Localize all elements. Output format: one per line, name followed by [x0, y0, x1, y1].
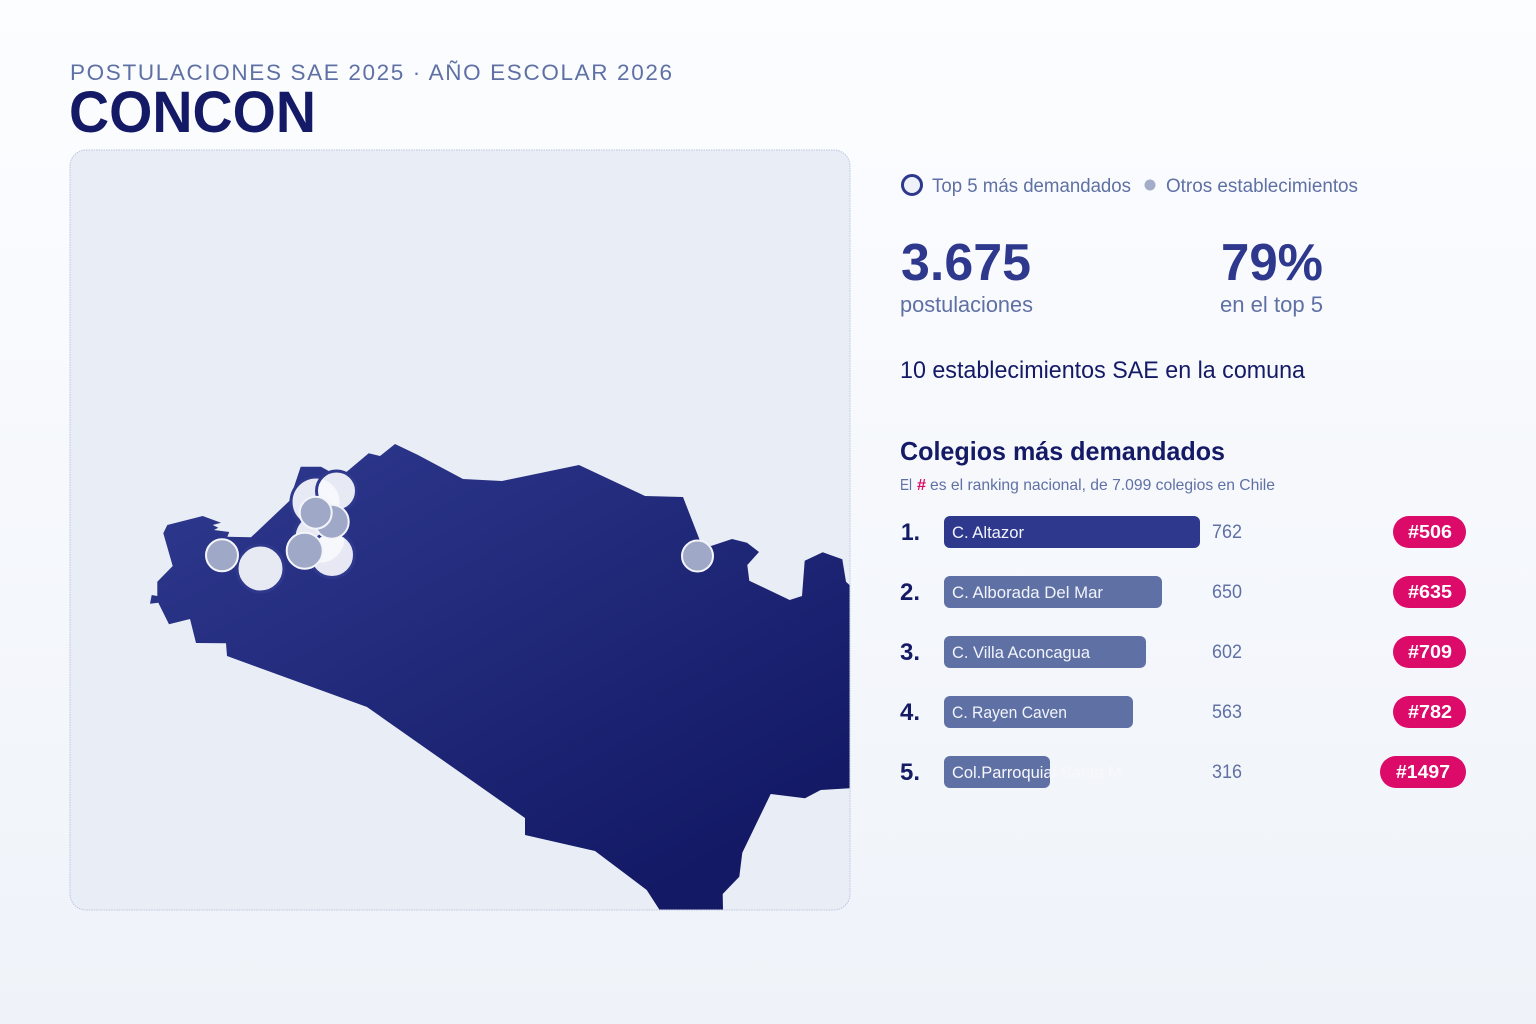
legend [902, 176, 1358, 197]
stat: applications [900, 234, 1033, 317]
markers: top 5 schools [237, 471, 356, 592]
row 2: C. Alborada Del Mar [952, 583, 1103, 602]
eyebrow: POSTULACIONES SAE 2025 · AÑO ESCOLAR 2026 [70, 60, 672, 85]
stat: top 5 share: en el top 5 [1220, 292, 1323, 317]
row 2: 650 [1212, 582, 1242, 603]
row 1: 1. [901, 519, 920, 546]
row 4 [900, 696, 1466, 728]
legend label: others: Otros establecimientos [1166, 176, 1358, 197]
ranking heading: Colegios más demandados [900, 436, 1225, 466]
stat: top 5 share [1220, 234, 1323, 317]
row 3: #709 [1408, 642, 1452, 662]
row 1: C. Altazor [952, 523, 1024, 542]
row 5: Col.Parroquial Santa M [952, 763, 1122, 782]
row 3: C. Villa Aconcagua [952, 643, 1091, 662]
row 1 [901, 516, 1466, 548]
row 1: #506 [1408, 522, 1452, 542]
stat: applications: 3.675 [901, 234, 1031, 292]
row 4: #782 [1408, 702, 1452, 722]
row 4: 4. [900, 699, 920, 726]
row 4: C. Rayen Caven [952, 703, 1067, 722]
title: CONCON [69, 80, 316, 145]
row 2: 2. [900, 579, 920, 606]
row 5: #1497 [1396, 762, 1450, 782]
ranking note: es el ranking nacional, de 7.099 colegios en Chile [930, 477, 1275, 494]
row 5 [900, 756, 1466, 788]
row 3: 3. [900, 639, 920, 666]
map: commune shape [150, 444, 850, 910]
row 4: 563 [1212, 702, 1242, 723]
row 2: #635 [1408, 582, 1452, 602]
icon: other dot [1144, 180, 1156, 190]
ranking note: # [917, 477, 926, 494]
panel: map [70, 150, 850, 910]
schools count: 10 establecimientos SAE en la comuna [900, 357, 1306, 384]
row 3 [900, 636, 1466, 668]
stat: applications: postulaciones [900, 292, 1033, 317]
row 1: 762 [1212, 522, 1242, 543]
row 5: 316 [1212, 762, 1242, 783]
icon: top 5 ring [902, 176, 922, 194]
markers: other schools [206, 497, 713, 572]
row 2 [900, 576, 1466, 608]
legend label: top 5: Top 5 más demandados [932, 176, 1131, 197]
row 3: 602 [1212, 642, 1242, 663]
row 5: 5. [900, 759, 920, 786]
stat: top 5 share: 79% [1221, 234, 1323, 292]
ranking note: El [900, 477, 912, 494]
